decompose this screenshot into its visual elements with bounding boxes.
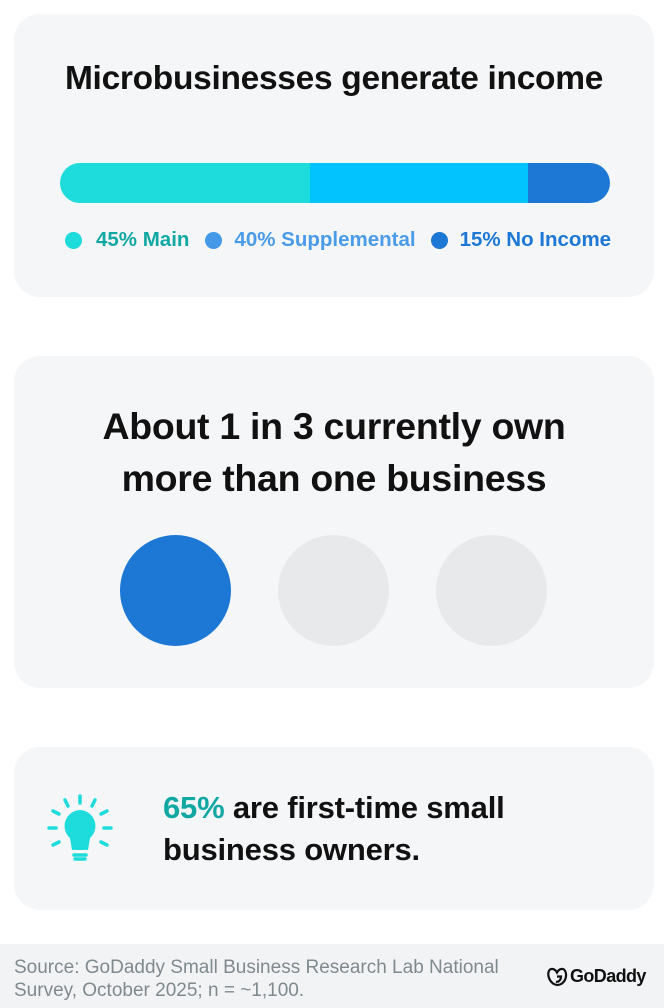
- title: about 1 in 3: more than one business: [122, 457, 546, 499]
- title: about 1 in 3: [102, 405, 566, 499]
- panel: first-time owners: [14, 747, 654, 910]
- icon: lightbulb: [47, 794, 113, 861]
- legend: 45% Main: [96, 228, 189, 251]
- panel: multiple businesses: [14, 356, 654, 688]
- logo: GoDaddy: GoDaddy: [570, 966, 646, 986]
- stacked bar: [60, 163, 610, 203]
- title: microbusinesses: Microbusinesses generate income: [65, 60, 603, 97]
- panel: income: [14, 14, 654, 297]
- title: about 1 in 3: About 1 in 3 currently own: [102, 405, 566, 447]
- source text: Source: GoDaddy Small Business Research Lab National: [14, 957, 499, 978]
- source text: Survey, October 2025; n = ~1,100.: [14, 980, 304, 1001]
- footer: [0, 944, 664, 1008]
- source text: [14, 957, 499, 1001]
- text: 65% first-time: [163, 790, 505, 867]
- legend: 40% Supplemental: [234, 228, 416, 251]
- text: 65% first-time: 65% are first-time small: [163, 790, 505, 825]
- legend: 15% No Income: [460, 228, 611, 251]
- legend: [65, 228, 611, 251]
- text: 65% first-time: business owners.: [163, 832, 420, 867]
- circles: [120, 535, 547, 646]
